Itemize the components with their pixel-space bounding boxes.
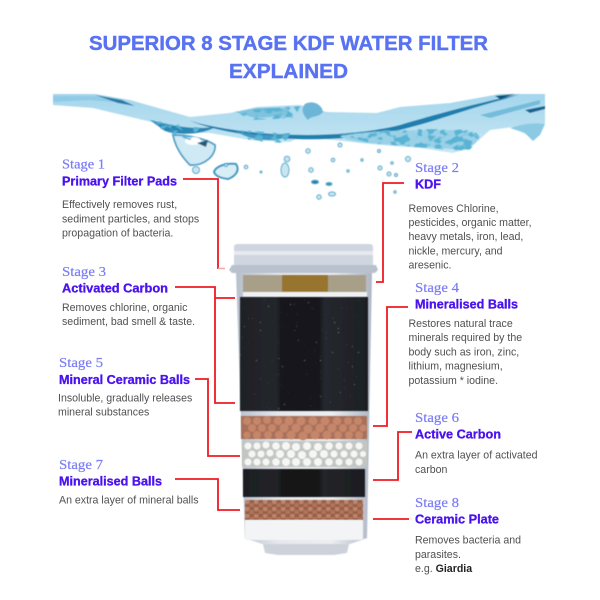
stage 1 text: Effectively removes rust,: [62, 199, 177, 211]
stage 1 text: Stage 1: [62, 156, 105, 172]
stage 8 text: parasites.: [415, 549, 461, 561]
stage 6 text: carbon: [415, 464, 447, 476]
stage 5 text: Stage 5: [59, 355, 103, 370]
stage 6 text: Stage 6: [415, 410, 459, 425]
stage 4 text: lithium, magnesium,: [408, 360, 503, 372]
stage 3 text: sediment, bad smell & taste.: [62, 316, 195, 328]
layer: mineral ceramic balls: [242, 441, 367, 467]
stage 8 text: e.g. Giardia: [415, 563, 472, 575]
stage 4 text: Restores natural trace: [408, 318, 513, 330]
layer: KDF granules: [243, 275, 367, 297]
stage 2 text: heavy metals, iron, lead,: [408, 231, 523, 243]
stage 2 text: Stage 2: [415, 160, 459, 175]
stage 3 text: Activated Carbon: [62, 282, 168, 296]
stage 4 text: Stage 4: [415, 280, 459, 295]
stage 2 text: Removes Chlorine,: [408, 203, 499, 215]
stage 5 text: mineral substances: [58, 406, 149, 418]
stage 4 text: [408, 280, 522, 387]
stage 2 text: [408, 160, 532, 272]
stage 4 text: Mineralised Balls: [415, 298, 518, 312]
stage 1 text: propagation of bacteria.: [62, 228, 173, 240]
stage 7 text: [59, 457, 199, 506]
stage 6 text: [415, 410, 538, 476]
stage 7 text: Mineralised Balls: [59, 474, 162, 488]
title: EXPLAINED: [229, 61, 348, 83]
water texture: [150, 106, 480, 152]
stage 7 text: Stage 7: [59, 457, 103, 472]
stage 2 text: aresenic.: [408, 260, 452, 272]
water splash banner: [53, 94, 545, 199]
layer: activated carbon: [240, 297, 368, 411]
layer: active carbon: [243, 469, 365, 497]
stage 3 text: [62, 264, 195, 328]
stage 8 text: [415, 495, 521, 575]
stage 4 text: body such as iron, zinc,: [408, 346, 519, 358]
filter cartridge: [229, 244, 378, 555]
bubbles: [192, 143, 410, 199]
stage 6 text: Active Carbon: [415, 428, 501, 442]
stage 2 text: KDF: [415, 178, 441, 192]
stage 4 text: minerals required by the: [408, 332, 522, 344]
layer: mineralised balls small: [245, 500, 363, 520]
stage 8 text: Removes bacteria and: [415, 534, 521, 546]
title: SUPERIOR 8 STAGE KDF WATER FILTER: [89, 33, 489, 55]
stage 5 text: Insoluble, gradually releases: [58, 392, 192, 404]
layer: ceramic plate: [245, 520, 363, 540]
stage 1 text: [62, 156, 199, 240]
stage 1 text: Primary Filter Pads: [62, 174, 177, 188]
connector lines: [175, 179, 412, 519]
stage 2 text: pesticides, organic matter,: [408, 217, 532, 229]
stage 6 text: An extra layer of activated: [415, 450, 538, 462]
stage 1 text: sediment particles, and stops: [62, 214, 199, 226]
stage 2 text: nickle, mercury, and: [408, 246, 503, 258]
stage 7 text: An extra layer of mineral balls: [59, 494, 199, 506]
stage 3 text: Stage 3: [62, 264, 106, 279]
stage 5 text: [58, 355, 192, 418]
stage 8 text: Ceramic Plate: [415, 512, 499, 526]
stage 3 text: Removes chlorine, organic: [62, 302, 188, 314]
title: [89, 33, 489, 83]
layer: mineralised balls: [241, 416, 367, 440]
stage 4 text: potassium * iodine.: [408, 375, 498, 387]
stage 8 text: Stage 8: [415, 495, 459, 510]
stage 5 text: Mineral Ceramic Balls: [59, 373, 190, 387]
cartridge body and cap: [229, 244, 378, 555]
